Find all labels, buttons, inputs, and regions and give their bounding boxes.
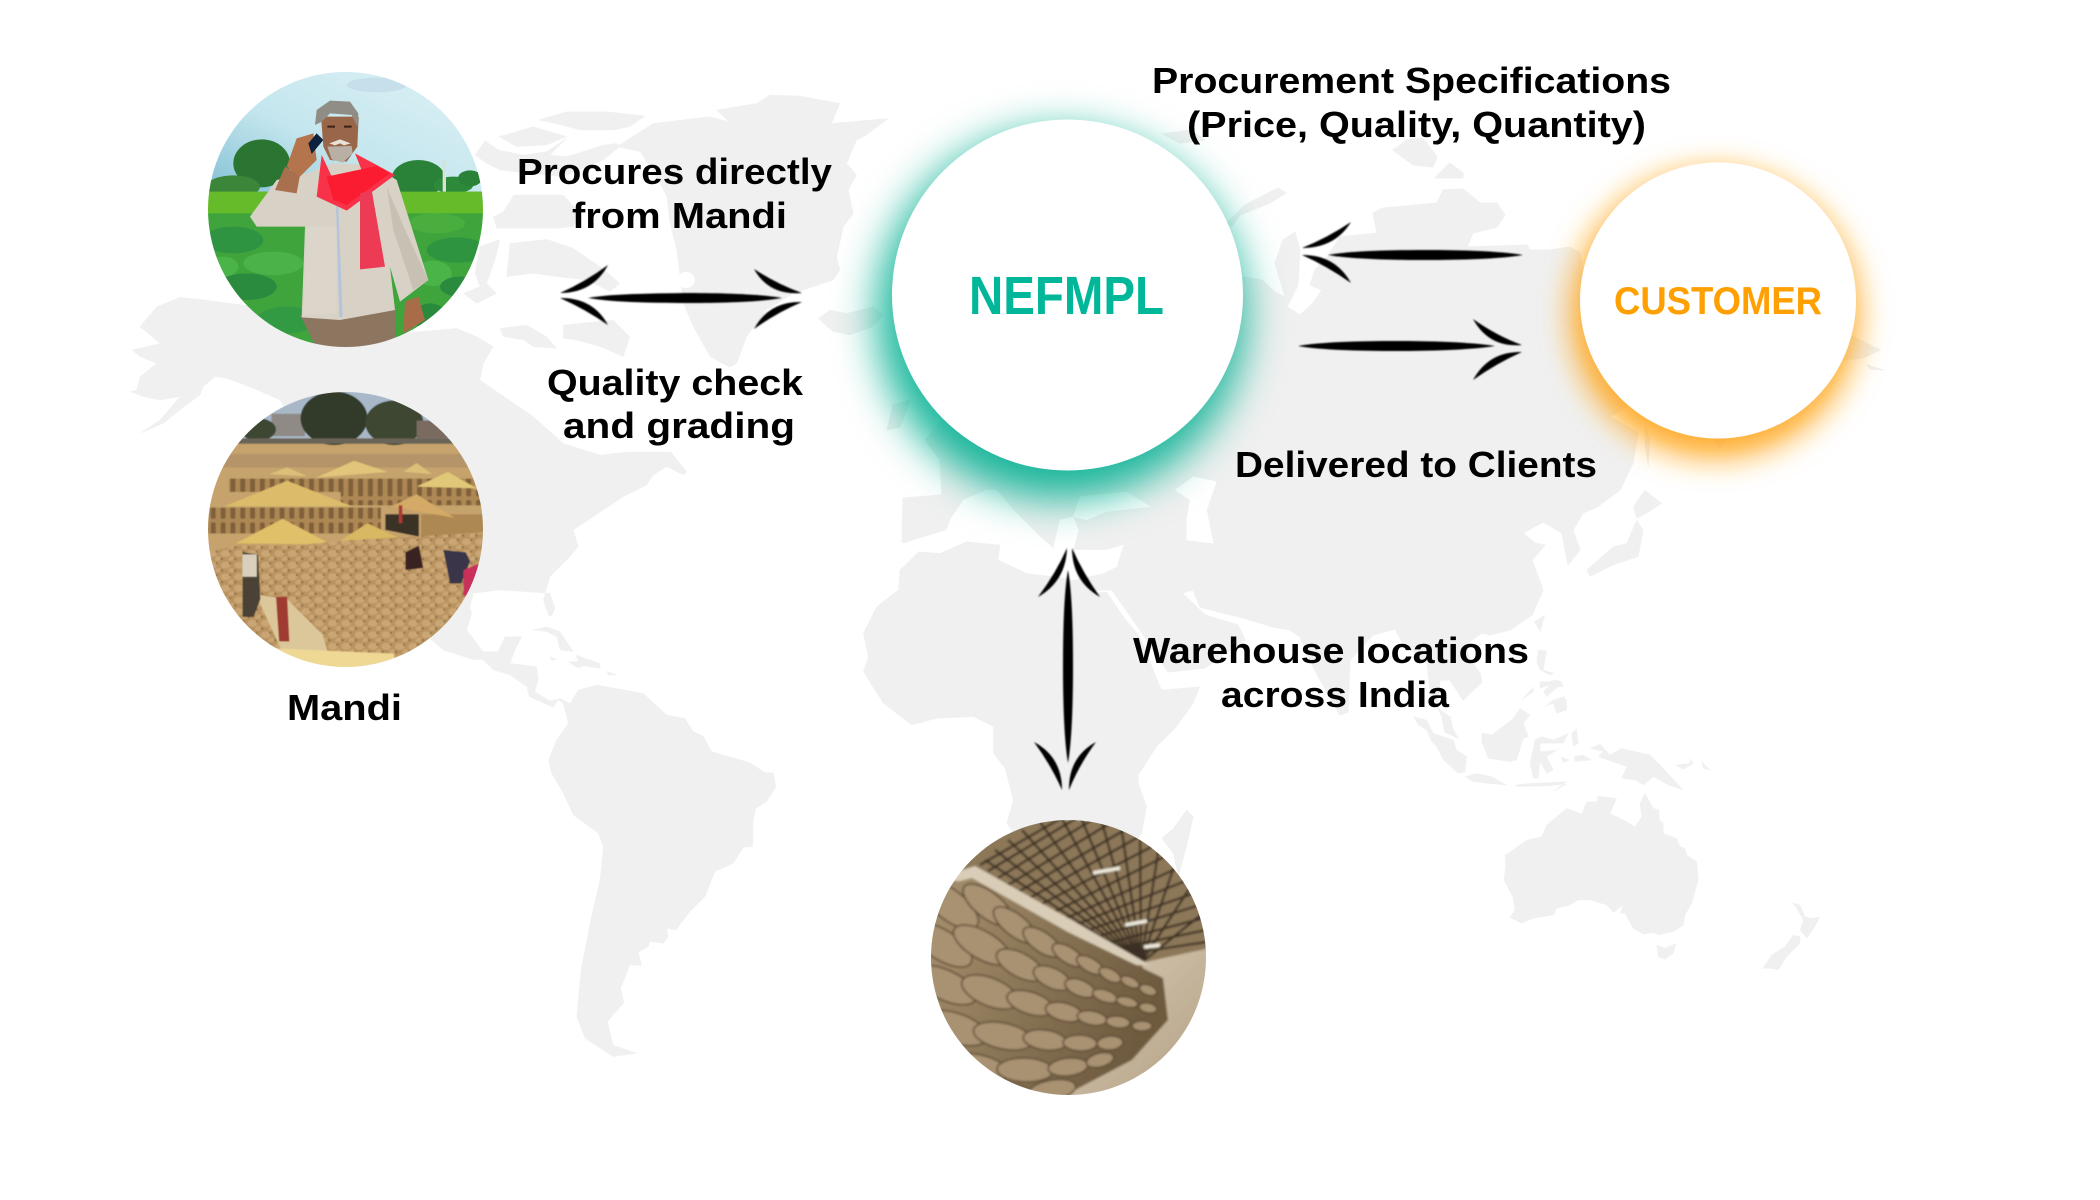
warehouse: floor (1068, 948, 1206, 1095)
mandi: grain piles (225, 481, 352, 506)
photo: warehouse with stacked sacks (931, 820, 1206, 1095)
text: delivered to clients: Delivered to Clients (1235, 444, 1597, 485)
text: procures directly from mandi: from Mandi (572, 195, 787, 236)
arrow: NEFMPL to mandi double headed (560, 265, 802, 329)
text: quality check and grading: and grading (563, 405, 795, 446)
farmer: lowered hand (403, 297, 425, 333)
NEFMPL label: NEFMPL (969, 266, 1164, 326)
text: quality check and grading (547, 362, 804, 446)
map: central and south america (483, 627, 776, 1057)
photo: mandi grain market (207, 389, 486, 675)
map: eurasia (902, 189, 1700, 738)
text: quality check and grading: Quality check (547, 362, 804, 403)
farmer: trousers (300, 307, 395, 348)
customer label: CUSTOMER (1614, 280, 1822, 323)
text: procurement specifications: (Price, Quality, Quantity) (1187, 104, 1646, 145)
map: japan and sakhalin (1587, 423, 1662, 577)
warehouse: sack wall (925, 878, 1168, 1100)
farmer: red scarf (317, 153, 395, 211)
mandi: sack rows (223, 454, 468, 468)
mandi: foreground sacks (210, 532, 483, 657)
farmer: phone (308, 133, 323, 154)
text: warehouse locations across india (1133, 630, 1529, 715)
customer node (1580, 162, 1856, 438)
map: africa and madagascar (863, 542, 1200, 877)
map: seas carved from eurasia (902, 477, 1217, 580)
text: mandi caption: Mandi (287, 687, 402, 728)
text: procures directly from mandi: Procures directly (517, 151, 832, 192)
text: procurement specifications: Procurement Specifications (1152, 60, 1671, 101)
text: procurement specifications (1152, 60, 1671, 145)
warehouse: ceiling grid (980, 815, 1207, 963)
farmer: shirt (250, 163, 428, 320)
map: greenland lake (677, 272, 695, 288)
farmer: face (321, 117, 359, 162)
warehouse: ceiling lights (1093, 868, 1160, 947)
arrow: NEFMPL to customer (1298, 319, 1522, 380)
map: arctic russian islands (887, 130, 1883, 448)
photo: farmer in field (203, 70, 490, 352)
NEFMPL node (892, 120, 1243, 470)
arrow: NEFMPL to warehouse double headed (1034, 548, 1100, 790)
farmer: beard (327, 146, 353, 163)
arrow: customer to NEFMPL (1302, 222, 1523, 283)
glow: customer orange shadow (1571, 170, 1859, 458)
farmer: raised arm and hand (275, 167, 300, 193)
farmer: eyes and moustache (327, 126, 352, 128)
text: warehouse locations across india: Warehouse locations (1133, 630, 1529, 671)
glow: NEFMPL teal shadow (877, 131, 1245, 499)
map: south east asia and oceania (1413, 615, 1820, 970)
text: procures directly from mandi (517, 151, 832, 236)
mandi: trees and building (272, 414, 305, 436)
farmer: hair (315, 101, 358, 127)
text: warehouse locations across india: across India (1221, 674, 1450, 715)
map: north america and arctic (130, 95, 888, 663)
world map background (130, 95, 1883, 1057)
mandi: workers and cart (243, 552, 260, 617)
warehouse: pale beam (930, 866, 1150, 965)
